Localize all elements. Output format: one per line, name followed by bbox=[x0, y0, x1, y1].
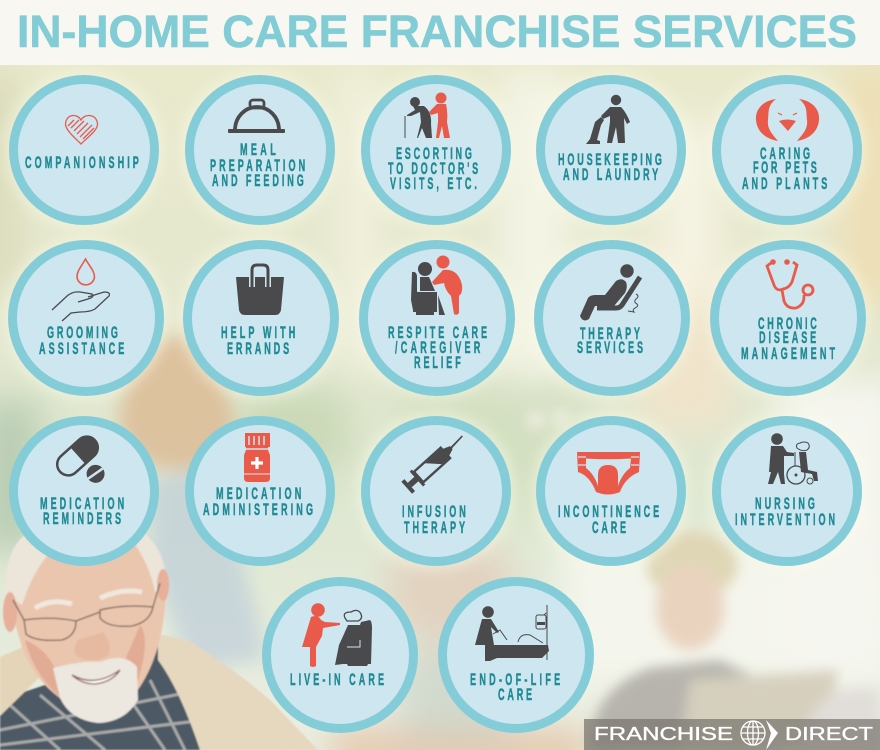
logo bar bbox=[584, 719, 880, 750]
icon: bag bbox=[236, 265, 284, 315]
label: COMPANIONSHIP bbox=[25, 153, 139, 172]
label bbox=[470, 670, 560, 704]
icon: drop and hand bbox=[52, 259, 109, 321]
label: ERRANDS bbox=[227, 339, 289, 358]
label: RESPITE CARE bbox=[388, 323, 487, 342]
service: incontinence care bbox=[540, 420, 682, 562]
service: grooming bbox=[12, 244, 160, 392]
nose bbox=[74, 632, 110, 660]
foreground man photo bbox=[0, 520, 318, 750]
icon: diaper bbox=[577, 452, 640, 494]
label: GROOMING bbox=[47, 323, 118, 342]
service: infusion therapy bbox=[366, 420, 506, 562]
label bbox=[221, 323, 295, 358]
label: MEAL bbox=[240, 140, 276, 159]
service: therapy bbox=[538, 244, 686, 392]
shirt bbox=[0, 640, 205, 750]
label: ESCORTING bbox=[396, 144, 472, 163]
icon: pill bottle bbox=[244, 433, 270, 482]
icon: syringe bbox=[400, 429, 470, 495]
label bbox=[388, 144, 478, 193]
title: IN-HOME CARE FRANCHISE SERVICES bbox=[17, 6, 857, 57]
label: DISEASE bbox=[759, 328, 816, 347]
service: nursing intervention bbox=[716, 420, 858, 562]
label: TO DOCTOR'S bbox=[388, 159, 478, 178]
label: SERVICES bbox=[577, 338, 643, 357]
label bbox=[577, 324, 643, 357]
label: MEDICATION bbox=[216, 484, 301, 503]
glasses bbox=[13, 583, 160, 640]
head bbox=[8, 520, 166, 715]
service: end-of-life care bbox=[442, 582, 590, 728]
icon: escort figures bbox=[405, 92, 450, 138]
beard bbox=[53, 658, 138, 723]
service: pets and plants bbox=[716, 80, 858, 220]
logo wordmark: FRANCHISE bbox=[594, 724, 733, 744]
icon: globe bbox=[741, 720, 778, 750]
service: errands bbox=[188, 244, 334, 392]
label: /CAREGIVER bbox=[395, 338, 481, 357]
service: escorting bbox=[366, 80, 506, 220]
label bbox=[203, 484, 313, 519]
label: END-OF-LIFE bbox=[470, 670, 560, 689]
label: CARE bbox=[498, 685, 532, 704]
label bbox=[741, 314, 835, 363]
cheeks bbox=[25, 625, 145, 705]
service: meal preparation bbox=[190, 80, 330, 220]
icon: dog and hands bbox=[756, 99, 819, 141]
label: INCONTINENCE bbox=[558, 502, 659, 521]
label: AND PLANTS bbox=[742, 174, 827, 193]
icon: bedside with IV bbox=[475, 605, 549, 661]
label: ADMINISTERING bbox=[203, 500, 313, 519]
label: FOR PETS bbox=[753, 158, 817, 177]
label: MANAGEMENT bbox=[741, 344, 835, 363]
label bbox=[735, 494, 835, 529]
label: AND LAUNDRY bbox=[563, 165, 658, 184]
service: medication administering bbox=[190, 420, 330, 562]
service: chronic disease bbox=[714, 244, 862, 392]
label: THERAPY bbox=[404, 518, 465, 537]
label: PREPARATION bbox=[210, 156, 305, 175]
cardigan bbox=[158, 634, 318, 750]
icon: caregiver with seated person bbox=[411, 256, 462, 315]
label: INTERVENTION bbox=[735, 510, 835, 529]
label bbox=[558, 150, 662, 184]
soft halos behind circles bbox=[4, 70, 870, 571]
smile bbox=[72, 670, 120, 684]
label bbox=[558, 502, 659, 537]
icon: cloche bbox=[228, 100, 285, 133]
service: housekeeping bbox=[540, 80, 682, 220]
service: companionship bbox=[14, 80, 154, 220]
title banner bbox=[0, 0, 880, 65]
label: CARING bbox=[760, 144, 810, 163]
icon: pills bbox=[52, 431, 108, 486]
label: RELIEF bbox=[414, 353, 461, 372]
ears bbox=[3, 592, 17, 632]
label: NURSING bbox=[755, 494, 815, 513]
service: respite care bbox=[364, 244, 510, 392]
service: live-in care bbox=[266, 582, 414, 728]
label: HOUSEKEEPING bbox=[558, 150, 662, 169]
eyebrows bbox=[35, 591, 142, 608]
label: LIVE-IN CARE bbox=[290, 670, 384, 689]
label bbox=[388, 323, 487, 372]
icon: heart bbox=[66, 115, 98, 144]
icon: recliner bbox=[580, 264, 640, 320]
label: HELP WITH bbox=[221, 323, 295, 342]
label: VISITS, ETC. bbox=[390, 174, 477, 193]
icon: vacuum person bbox=[586, 95, 630, 144]
label bbox=[40, 494, 124, 528]
label: CARE bbox=[592, 518, 626, 537]
label bbox=[39, 323, 124, 358]
icon: nurse with wheelchair bbox=[768, 433, 818, 484]
label bbox=[402, 502, 466, 537]
icon: carer feeding seated person bbox=[302, 603, 372, 667]
label: CHRONIC bbox=[758, 314, 817, 333]
label: REMINDERS bbox=[43, 509, 121, 528]
hair bbox=[6, 522, 70, 605]
logo wordmark: DIRECT bbox=[785, 724, 873, 744]
label: INFUSION bbox=[402, 502, 466, 521]
label bbox=[742, 144, 827, 193]
label bbox=[210, 140, 305, 190]
icon: stethoscope bbox=[767, 259, 813, 308]
label: MEDICATION bbox=[40, 494, 124, 513]
label: AND FEEDING bbox=[212, 171, 304, 190]
service: medication reminders bbox=[14, 420, 154, 562]
label: ASSISTANCE bbox=[39, 339, 124, 358]
label: THERAPY bbox=[580, 324, 640, 343]
